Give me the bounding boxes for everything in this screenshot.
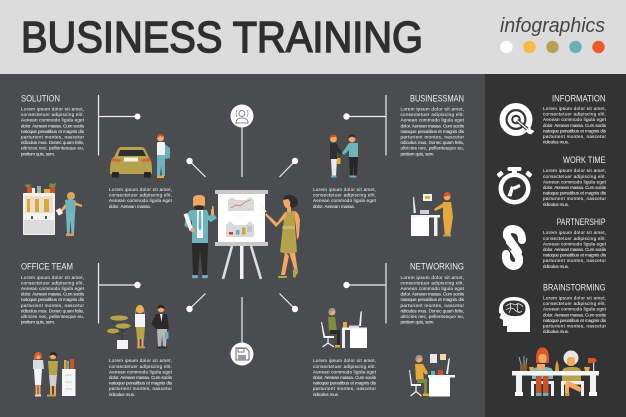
text: office team: Lorem ipsum dolor sit amet, [21,275,84,280]
text: brainstorming: natoque penatibus et magnis dis [543,318,607,323]
text: office team: Aenean commodo ligula eget [21,286,85,291]
text: car caption: dolor. Aenean massa. [109,204,151,209]
icon: floppy disk badge [230,297,254,366]
text: handshake caption: dolor. Aenean massa. [313,204,355,209]
right panel [485,74,626,417]
text: networking: Lorem ipsum dolor sit amet, [400,275,464,280]
text: partnership: Lorem ipsum dolor sit amet, [543,230,606,235]
text: solution: dolor. Aenean massa. Cum sociis [21,123,85,128]
illustration: presentation board [215,190,268,279]
text: partnership: natoque penatibus et magnis dis [543,253,607,258]
main panel [0,74,485,417]
heading: solution: SOLUTION [21,93,60,103]
header band [0,0,626,74]
text: information: consectetuer adipiscing elit. [543,112,606,117]
text: networking: pretium quis, sem. [400,320,434,325]
text: work time [543,168,607,207]
connector: lower left diagonal [186,294,206,312]
text: handshake caption: Aenean commodo ligula eget [313,198,377,203]
text: networking caption: ridiculus mus. [313,392,339,397]
text: work time: natoque penatibus et magnis dis [543,191,607,196]
illustration: bookshelf and woman [23,183,82,236]
text: solution: ridiculus mus. Donec quam felis, [21,140,84,145]
text: brainstorming [543,296,607,334]
heading: work time: WORK TIME [563,155,606,165]
text: information: Aenean commodo ligula eget [543,117,607,122]
text: information [543,106,607,145]
illustration: male presenter [184,195,217,278]
heading: brainstorming: BRAINSTORMING [543,283,606,293]
text: solution: pretium quis, sem. [21,151,55,156]
text: networking: natoque penatibus et magnis dis [400,297,465,302]
text: office team [21,275,85,325]
text: office team: natoque penatibus et magnis dis [21,297,85,302]
illustration: handshake [330,134,358,178]
heading: businessman: BUSINESSMAN [410,93,464,103]
heading: partnership: PARTNERSHIP [557,217,606,227]
connector: businessman [343,95,386,156]
text: brainstorming: ridiculus mus. [543,329,569,334]
text: networking: dolor. Aenean massa. Cum sociis [400,292,465,297]
text: solution: ultricies nec, pellentesque eu, [21,146,84,151]
text: work time: Lorem ipsum dolor sit amet, [543,168,606,173]
connector: solution [98,95,140,156]
text: solution: parturient montes, nascetur [21,134,84,140]
text: businessman: natoque penatibus et magnis dis [400,129,465,134]
text: work time: Aenean commodo ligula eget [543,179,607,184]
text: work time: parturient montes, nascetur [543,196,606,201]
text: information: parturient montes, nascetur [543,134,606,139]
text: handshake caption: Lorem ipsum dolor sit amet, [313,187,376,192]
text: office team: consectetuer adipiscing elit. [21,280,84,285]
icon: target [500,103,534,136]
connector: office team [98,263,141,324]
text: businessman [400,106,465,156]
text: brainstorming: dolor. Aenean massa. Cum sociis [543,312,607,317]
illustration: worker at desk with posters [409,354,455,396]
text: office team caption: dolor. Aenean massa. Cum sociis [109,375,173,380]
text: networking caption: parturient montes, nascetur [313,386,376,391]
title: BUSINESS TRAINING [21,14,423,62]
text: work time: consectetuer adipiscing elit. [543,174,606,179]
text: networking caption: dolor. Aenean massa. Cum sociis [313,375,377,380]
text: information: dolor. Aenean massa. Cum sociis [543,123,607,128]
illustration: two women and cabinet [33,352,76,396]
text: partnership: consectetuer adipiscing elit. [543,236,606,241]
text: networking: ridiculus mus. Donec quam felis, [400,308,464,313]
text: solution: natoque penatibus et magnis dis [21,129,85,134]
heading: office team: OFFICE TEAM [21,261,73,271]
text: office team caption: consectetuer adipiscing elit. [109,364,172,369]
text: office team: parturient montes, nascetur [21,303,84,308]
text: networking: ultricies nec, pellentesque eu, [400,314,464,319]
heading: networking: NETWORKING [410,261,464,271]
text: handshake caption [313,187,377,209]
text: office team: pretium quis, sem. [21,320,55,325]
text: office team: ultricies nec, pellentesque eu, [21,314,84,319]
text: brainstorming: Aenean commodo ligula eget [543,307,607,312]
text: office team caption: parturient montes, nascetur [109,386,172,391]
text: office team caption: ridiculus mus. [109,392,135,397]
connector: upper left diagonal [186,158,206,177]
illustration: plant and office colleagues [107,305,169,349]
connector: upper right diagonal [280,158,298,177]
text: office team caption: Aenean commodo ligula eget [109,369,173,374]
text: partnership: ridiculus mus. [543,264,569,269]
illustration: car and man [110,134,170,178]
text: partnership: Aenean commodo ligula eget [543,241,607,246]
text: networking caption: consectetuer adipiscing elit. [313,364,376,369]
icon: head with brain [499,297,530,332]
icon: stopwatch [496,167,533,204]
illustration: man at desk [321,308,367,348]
text: businessman: parturient montes, nascetur [400,134,464,140]
text: businessman: ridiculus mus. Donec quam felis, [400,140,464,145]
text: work time: ridiculus mus. [543,202,569,207]
text: brainstorming: parturient montes, nascetur [543,324,606,328]
text: office team: dolor. Aenean massa. Cum sociis [21,292,85,297]
text: information: natoque penatibus et magnis dis [543,128,607,133]
text: businessman: Lorem ipsum dolor sit amet, [400,106,464,112]
text: businessman: Aenean commodo ligula eget [400,118,465,123]
illustration: desk and woman [411,192,453,236]
text: partnership [543,230,607,269]
text: businessman: ultricies nec, pellentesque eu, [400,146,464,151]
connector: lower right diagonal [280,294,298,312]
text: solution: consectetuer adipiscing elit. [21,112,84,117]
text: partnership: dolor. Aenean massa. Cum sociis [543,247,607,252]
text: car caption [109,187,173,209]
illustration: meeting table [512,348,599,396]
text: solution: Lorem ipsum dolor sit amet, [21,106,84,112]
text: car caption: Aenean commodo ligula eget [109,198,173,203]
icon: linked hands [505,229,522,266]
text: office team caption: Lorem ipsum dolor sit amet, [109,358,172,363]
text: office team caption: natoque penatibus et magnis dis [109,381,173,386]
text: car caption: Lorem ipsum dolor sit amet, [109,187,172,192]
text: information: Lorem ipsum dolor sit amet, [543,106,606,111]
infographics label: infographics [500,15,605,37]
text: solution [21,106,85,156]
text: partnership: parturient montes, nascetur [543,258,606,263]
text: networking: Aenean commodo ligula eget [400,286,465,291]
text: information: ridiculus mus. [543,140,569,145]
text: brainstorming: consectetuer adipiscing elit. [543,301,606,306]
text: networking caption: Lorem ipsum dolor sit amet, [313,358,376,363]
connector: networking [343,263,386,324]
colour dots [500,41,605,53]
text: networking: parturient montes, nascetur [400,303,464,308]
text: office team caption [109,358,173,397]
heading: information: INFORMATION [552,93,606,103]
text: office team: ridiculus mus. Donec quam felis, [21,308,84,313]
text: networking caption: natoque penatibus et magnis dis [313,381,377,386]
illustration: female presenter [261,195,300,278]
text: businessman: consectetuer adipiscing elit. [400,112,464,117]
text: solution: Aenean commodo ligula eget [21,118,85,123]
text: businessman: pretium quis, sem. [400,151,434,156]
text: networking caption [313,358,377,397]
icon: people badge [230,104,254,177]
text: networking caption: Aenean commodo ligula eget [313,369,377,374]
text: handshake caption: consectetuer adipiscing elit. [313,193,376,198]
text: car caption: consectetuer adipiscing elit. [109,193,172,198]
text: businessman: dolor. Aenean massa. Cum sociis [400,123,465,128]
text: networking [400,275,465,325]
text: brainstorming: Lorem ipsum dolor sit amet, [543,296,606,300]
text: networking: consectetuer adipiscing elit. [400,280,464,285]
text: work time: dolor. Aenean massa. Cum sociis [543,185,607,190]
